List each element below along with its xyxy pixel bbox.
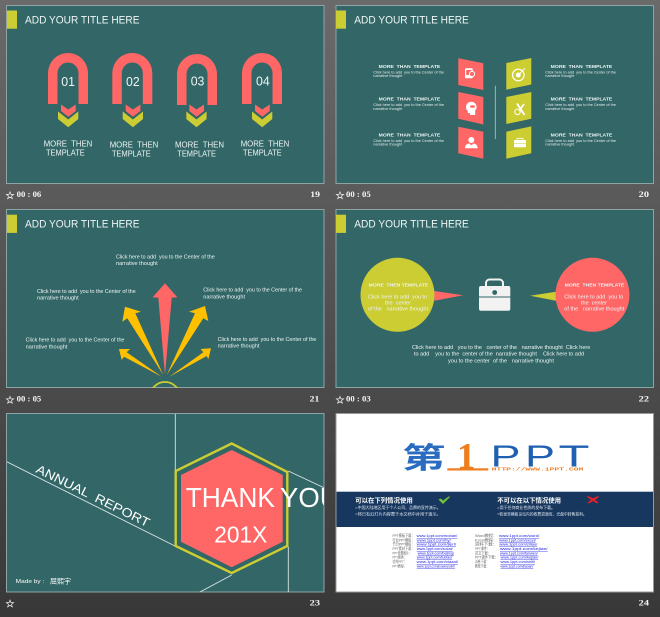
item 02: MORE THEN — [110, 140, 159, 149]
left column text: narrative thought — [373, 74, 403, 78]
footer: slide 20: 00 : 05 — [346, 189, 371, 199]
footer: slide 21 — [6, 394, 319, 404]
logo — [402, 435, 590, 478]
right circle callout: MORE THEN TEMPLATE — [565, 283, 625, 289]
caption — [412, 345, 590, 364]
right column text: Click here to add you to the Center of the — [545, 139, 616, 143]
link list: www.1ppt.com/word/ — [499, 533, 540, 538]
link list: www.1ppt.com/powerpoint/ — [417, 563, 456, 568]
usage band: =收录至模板论坛内的收费资源库、光盘中转售获利。 — [497, 512, 587, 517]
red icon tile: people — [458, 127, 483, 159]
link list: 试卷下载： — [475, 558, 489, 564]
yellow icon tile: toolbox — [506, 126, 531, 159]
red icon tile: tablet — [458, 58, 483, 90]
panel: slide 23 — [6, 414, 340, 592]
title accent and heading: ADD YOUR TITLE HERE — [354, 219, 469, 231]
right column text: MORE THAN TEMPLATE — [551, 64, 613, 70]
icon: briefcase — [479, 280, 510, 311]
logo: P — [525, 439, 555, 474]
caption: Click here to add you to the center of the narrative thought Click here — [412, 345, 590, 351]
right column text: MORE THAN TEMPLATE — [551, 97, 613, 103]
arrow captions: narrative thought — [203, 294, 246, 300]
link list: www.1ppt.com/sucai/ — [417, 546, 454, 551]
left column text: MORE THAN TEMPLATE — [379, 64, 441, 70]
link list: 优秀PPT： — [392, 558, 406, 564]
arrow captions: narrative thought — [37, 296, 79, 302]
arrow captions: Click here to add you to the Center of the — [218, 337, 317, 343]
left column text: MORE THAN TEMPLATE — [379, 97, 441, 103]
title accent and heading — [336, 10, 469, 29]
arrow captions — [26, 254, 317, 350]
link list: 行业PPT模板： — [392, 536, 414, 542]
yellow icon tile: target — [506, 58, 531, 90]
item 02 — [110, 53, 159, 158]
link list: PPT模板下载： — [392, 532, 414, 538]
left circle callout: of the narrative thought — [368, 306, 429, 312]
link list: www.1ppt.com/moban/ — [417, 533, 458, 538]
left column text: narrative thought — [373, 142, 403, 146]
thank you heading — [186, 488, 324, 508]
author line: 屈熙宇 — [50, 576, 71, 586]
left circle callout — [360, 258, 463, 332]
left column text: MORE THAN TEMPLATE — [379, 132, 441, 138]
link list: www.1ppt.com/ziliao/ — [499, 542, 538, 547]
year: 201X — [214, 522, 268, 548]
logo: P — [490, 439, 520, 474]
link list: www.1ppt.com/kejian/ — [500, 555, 539, 560]
link list: PPT教程： — [392, 562, 406, 568]
title accent and heading: ADD YOUR TITLE HERE — [25, 14, 140, 26]
logo: T — [558, 439, 590, 474]
link list: 节日PPT模板： — [392, 541, 414, 547]
icon: cross — [587, 496, 599, 504]
left column text: Click here to add you to the Center of the — [373, 139, 444, 143]
usage band — [336, 492, 653, 527]
left circle callout: Click here to add you to — [368, 295, 427, 301]
title accent and heading: ADD YOUR TITLE HERE — [25, 219, 140, 231]
usage band: 可以在下列情况使用 — [355, 496, 413, 504]
usage band: =用于任何商业性质的发布下载。 — [497, 505, 555, 510]
right circle callout: of the narrative thought — [564, 306, 625, 312]
footer: slide 21: 00 : 05 — [17, 394, 41, 404]
panel: slide 20 — [336, 6, 654, 184]
arrow captions: Click here to add you to the Center of the — [203, 288, 302, 294]
panel: slide 19 — [6, 6, 324, 184]
link list: 范文下载： — [475, 549, 491, 555]
link list: Word教程： — [475, 532, 497, 538]
link list: www.1ppt.com/tubiao/ — [417, 555, 453, 560]
arrow captions: Click here to add you to the Center of the — [116, 254, 215, 260]
item 01: 01 — [61, 75, 75, 89]
red icon tile: head — [458, 92, 483, 124]
usage band: 不可以在以下情况使用 — [497, 496, 561, 504]
arrow captions: narrative thought — [26, 344, 68, 350]
usage band: =将已有幻灯片内容置于本文档中并用于演示。 — [355, 512, 441, 517]
link list: www.1ppt.com/shiti/ — [500, 559, 536, 564]
footer: slide 20 — [336, 189, 649, 199]
footer: slide 22: 00 : 03 — [346, 394, 371, 404]
link list: Excel教程： — [475, 536, 497, 542]
arrow fan — [119, 283, 211, 388]
item 04 — [241, 53, 290, 158]
caption: you to the center of the narrative thought — [448, 358, 555, 364]
arrow captions: narrative thought — [218, 344, 260, 350]
link list: www.1ppt.com/hy/ — [417, 537, 452, 542]
footer: slide 24: 24 — [639, 597, 650, 607]
thank you heading: THANK — [186, 482, 276, 513]
footer: slide 22: 22 — [639, 394, 649, 404]
arrow captions: Click here to add you to the Center of the — [37, 289, 136, 295]
right circle callout: Click here to add you to — [564, 295, 623, 301]
link list: www.1ppt.com/fanwen/ — [500, 550, 539, 555]
right column text: narrative thought — [545, 142, 575, 146]
footer: slide 19: 00 : 06 — [17, 189, 41, 199]
item 02: 02 — [126, 75, 140, 89]
annual report label: ANNUAL REPORT — [34, 462, 152, 530]
arrow captions: Click here to add you to the Center of the — [26, 338, 125, 344]
link list: 教案下载： — [475, 562, 489, 568]
title accent and heading: ADD YOUR TITLE HERE — [354, 14, 469, 26]
right column text: MORE THAN TEMPLATE — [551, 132, 613, 138]
link list: www.1ppt.com/beijing/ — [418, 550, 455, 555]
panel: slide 21 — [6, 209, 324, 388]
yellow icon tile: tools — [506, 92, 531, 124]
link list: 资料下载： — [475, 541, 497, 547]
item 04: 04 — [256, 74, 270, 88]
right column text — [545, 64, 616, 146]
footer: slide 21: 21 — [310, 394, 319, 404]
footer: slide 20: 20 — [639, 189, 649, 199]
footer: slide 23: 23 — [310, 597, 320, 607]
title accent and heading — [7, 10, 140, 29]
caption: to add you to the center of the narrative thought Click here to add — [414, 352, 584, 358]
panel: slide 24 — [336, 414, 654, 592]
link list: PPT素材下载： — [392, 545, 414, 551]
link list: www.1ppt.com/excel/ — [499, 537, 537, 542]
item 03: TEMPLATE — [177, 149, 216, 158]
thank you heading: YOU — [280, 482, 340, 513]
center divider — [494, 86, 496, 139]
title accent and heading — [7, 215, 140, 233]
link list: PPT图表： — [392, 554, 406, 560]
footer: slide 19: 19 — [310, 189, 320, 199]
author line: Made by : — [16, 579, 44, 585]
link list: PPT课件下载： — [475, 554, 498, 560]
link list — [392, 532, 549, 568]
item 01: MORE THEN — [44, 140, 93, 149]
left circle callout: the center — [385, 301, 411, 307]
item 02: TEMPLATE — [112, 149, 151, 158]
logo: HTTP://WWW.1PPT.COM — [492, 466, 584, 472]
right column text: Click here to add you to the Center of the — [545, 103, 616, 107]
right column text: Click here to add you to the Center of the — [545, 70, 616, 74]
link list: www.1ppt.com/jiaoan/ — [500, 563, 534, 568]
left column text — [373, 64, 444, 146]
right circle callout — [530, 258, 630, 332]
link list: www.1ppt.com/jieri/ — [417, 542, 457, 547]
right column text: narrative thought — [545, 107, 575, 111]
panel: slide 22 — [336, 210, 654, 388]
link list: www.1ppt.com/kejian/ — [500, 546, 549, 551]
usage band: =中国大陆地区用于个人公司、品牌的宣传演示。 — [355, 505, 441, 510]
logo: 第 — [402, 435, 446, 477]
item 04: MORE THEN — [241, 140, 290, 149]
right column text: narrative thought — [545, 74, 575, 78]
decorative lines and hexagon — [7, 414, 340, 592]
link list: PPT背景图片： — [392, 549, 412, 555]
logo: 1 — [457, 436, 476, 478]
right circle callout: the center — [581, 301, 607, 307]
arrow captions: narrative thought — [116, 261, 158, 267]
link list: PPT课件： — [475, 545, 490, 551]
item 04: TEMPLATE — [243, 149, 282, 158]
item 01: TEMPLATE — [46, 149, 85, 158]
footer: slide 23 — [6, 597, 320, 607]
footer: slide 19 — [6, 189, 320, 199]
link list: www.1ppt.com/xiazai/ — [417, 559, 459, 564]
footer: slide 22 — [336, 394, 649, 404]
item 03 — [175, 54, 224, 158]
author line — [16, 576, 71, 586]
icon: check — [438, 496, 450, 504]
item 03: 03 — [191, 74, 204, 88]
item 03: MORE THEN — [175, 140, 224, 149]
title accent and heading — [336, 215, 469, 233]
left circle callout: MORE THEN TEMPLATE — [369, 283, 429, 289]
left column text: narrative thought — [373, 107, 403, 111]
left column text: Click here to add you to the Center of the — [373, 70, 444, 74]
item 01 — [44, 53, 93, 158]
left column text: Click here to add you to the Center of the — [373, 103, 444, 107]
